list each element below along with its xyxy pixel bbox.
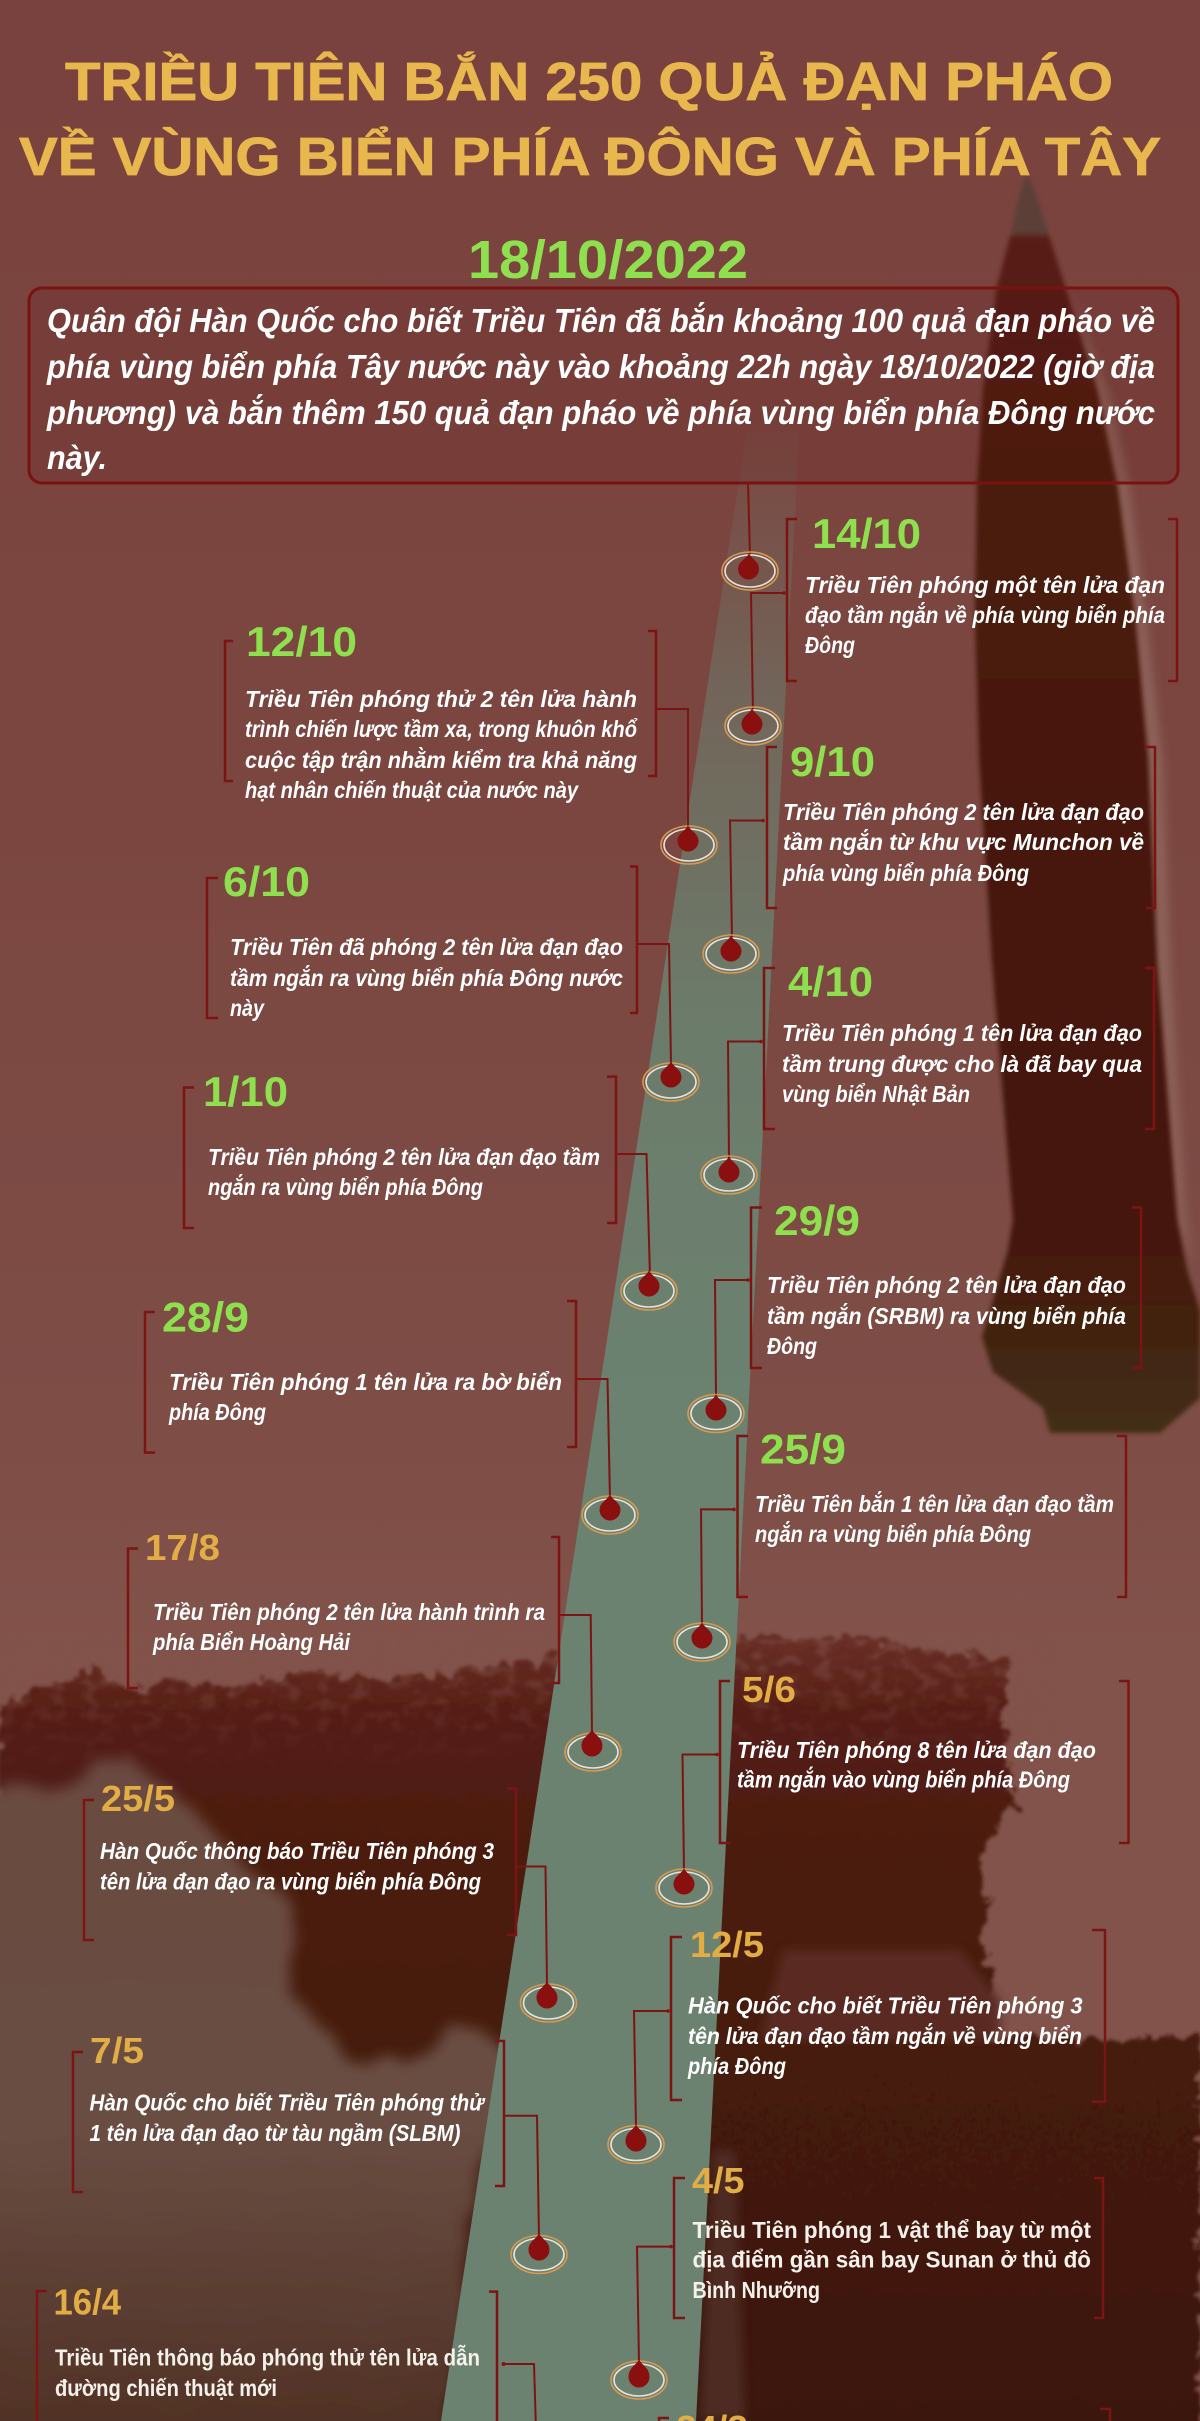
timeline item: 12/10: hạt nhân chiến thuật của nước này	[245, 777, 579, 803]
timeline item: 4/10: tầm trung được cho là đã bay qua	[782, 1051, 1142, 1077]
timeline item: 1/10: 1/10	[203, 1068, 288, 1115]
background: rocket silhouette	[975, 175, 1200, 1433]
timeline item: 16/4: Triều Tiên thông báo phóng thử tên lửa dẫn	[55, 2344, 480, 2370]
timeline item: 9/10	[703, 738, 1155, 973]
timeline item: 25/5: Hàn Quốc thông báo Triều Tiên phóng 3	[100, 1838, 494, 1864]
timeline item: 17/8	[128, 1527, 621, 1771]
timeline item: 4/10: 4/10	[788, 958, 873, 1005]
timeline item: 29/9	[688, 1197, 1141, 1432]
timeline item: 12/5: Hàn Quốc cho biết Triều Tiên phóng 3	[688, 1993, 1083, 2019]
timeline item: 6/10: này	[230, 995, 265, 1021]
timeline item: 4/10: Triều Tiên phóng 1 tên lửa đạn đạo	[782, 1020, 1142, 1046]
title	[19, 51, 1161, 187]
timeline item: 9/10: tầm ngắn từ khu vực Munchon về	[783, 828, 1144, 855]
timeline item: 28/9: 28/9	[162, 1294, 249, 1340]
timeline item: 4/5: 4/5	[692, 2160, 744, 2201]
timeline item: 25/5	[84, 1778, 576, 2022]
timeline item: 12/10: Triều Tiên phóng thử 2 tên lửa hành	[245, 686, 637, 712]
lead text panel	[29, 288, 1178, 483]
timeline item: 12/5: 12/5	[690, 1924, 764, 1965]
timeline item: 25/5: 25/5	[101, 1778, 175, 1819]
timeline item: 25/9: ngắn ra vùng biển phía Đông	[755, 1520, 1031, 1547]
lead text panel: này.	[47, 439, 107, 476]
timeline item: 17/8: Triều Tiên phóng 2 tên lửa hành trình ra	[153, 1599, 545, 1625]
timeline item: 14/10: đạo tầm ngắn về phía vùng biển phía	[805, 601, 1165, 628]
timeline item: 7/5	[73, 2030, 567, 2274]
timeline item: 24/3	[659, 2408, 1110, 2421]
lead text panel: phương) và bắn thêm 150 quả đạn pháo về phía vùng biển phía Đông nước	[46, 394, 1155, 431]
timeline item: 16/4	[37, 2282, 536, 2421]
timeline item: 28/9: Triều Tiên phóng 1 tên lửa ra bờ biển	[169, 1369, 562, 1395]
timeline item: 4/10: vùng biển Nhật Bản	[782, 1081, 970, 1107]
background: mottled tree crowns	[0, 1640, 1060, 1770]
background: rocket light stripe	[1065, 286, 1195, 1270]
marker: from lead panel	[722, 483, 778, 590]
timeline item: 12/10	[225, 618, 717, 864]
timeline item: 5/6: 5/6	[742, 1669, 796, 1710]
timeline item: 1/10: ngắn ra vùng biển phía Đông	[208, 1173, 483, 1200]
timeline item: 9/10: Triều Tiên phóng 2 tên lửa đạn đạo	[783, 799, 1144, 825]
timeline item: 4/10	[701, 958, 1154, 1194]
timeline item: 1/10	[184, 1068, 677, 1310]
background: smoke cloud	[0, 1755, 520, 2421]
timeline item: 6/10: 6/10	[223, 858, 310, 905]
timeline item: 16/4: đường chiến thuật mới	[55, 2375, 277, 2401]
timeline item: 28/9	[145, 1294, 638, 1534]
timeline item: 14/10: Đông	[805, 632, 855, 658]
background: tree line and ground	[0, 1636, 1200, 2421]
timeline item: 14/10	[725, 510, 1177, 745]
timeline item: 5/6: Triều Tiên phóng 8 tên lửa đạn đạo	[737, 1737, 1096, 1763]
timeline item: 16/4: 16/4	[54, 2282, 121, 2323]
timeline item: 5/6	[656, 1669, 1128, 1907]
timeline item: 4/5: Bình Nhưỡng	[692, 2277, 820, 2303]
timeline item: 29/9: 29/9	[774, 1197, 860, 1244]
timeline item: 12/10: trình chiến lược tầm xa, trong khuôn khổ	[245, 716, 638, 742]
timeline item: 9/10: phía vùng biển phía Đông	[782, 860, 1029, 886]
timeline item: 12/10: cuộc tập trận nhằm kiểm tra khả năng	[245, 746, 637, 773]
timeline item: 25/5: tên lửa đạn đạo ra vùng biển phía Đông	[100, 1868, 481, 1894]
timeline item: 12/5: tên lửa đạn đạo tầm ngắn về vùng biển	[688, 2022, 1082, 2049]
timeline item: 7/5: Hàn Quốc cho biết Triều Tiên phóng thử	[90, 2090, 486, 2116]
timeline item: 6/10: tầm ngắn ra vùng biển phía Đông nước	[230, 964, 623, 991]
background: lit wall	[700, 2150, 745, 2421]
timeline item: 7/5: 7/5	[90, 2030, 144, 2071]
timeline item: 28/9: phía Đông	[168, 1399, 266, 1425]
timeline item: 6/10	[207, 858, 699, 1101]
timeline item: 29/9: Đông	[767, 1333, 817, 1359]
lead text panel: Quân đội Hàn Quốc cho biết Triều Tiên đã bắn khoảng 100 quả đạn pháo về	[47, 302, 1155, 339]
timeline item: 5/6: tầm ngắn vào vùng biển phía Đông	[737, 1766, 1070, 1792]
timeline item: 9/10: 9/10	[790, 738, 875, 785]
timeline item: 14/10: 14/10	[812, 510, 921, 557]
main date: 18/10/2022	[468, 230, 748, 290]
lead text panel: phía vùng biển phía Tây nước này vào khoảng 22h ngày 18/10/2022 (giờ địa	[46, 348, 1155, 385]
timeline item: 17/8: 17/8	[145, 1527, 220, 1568]
timeline item: 14/10: Triều Tiên phóng một tên lửa đạn	[805, 572, 1165, 598]
title: VỀ VÙNG BIỂN PHÍA ĐÔNG VÀ PHÍA TÂY	[19, 126, 1161, 187]
background: building roof	[760, 1950, 1000, 2040]
timeline item: 6/10: Triều Tiên đã phóng 2 tên lửa đạn đạo	[230, 934, 623, 960]
timeline item: 12/5: phía Đông	[687, 2053, 786, 2079]
timeline item: 4/5: địa điểm gần sân bay Sunan ở thủ đô	[692, 2246, 1091, 2272]
title: TRIỀU TIÊN BẮN 250 QUẢ ĐẠN PHÁO	[65, 51, 1113, 112]
background: light beam	[441, 415, 800, 2421]
timeline item: 17/8: phía Biển Hoàng Hải	[152, 1629, 351, 1655]
timeline item: 7/5: 1 tên lửa đạn đạo từ tàu ngầm (SLBM)	[90, 2120, 460, 2146]
timeline item: 12/5	[608, 1924, 1105, 2164]
timeline item: 29/9: tầm ngắn (SRBM) ra vùng biển phía	[767, 1302, 1126, 1329]
timeline item: 4/5: Triều Tiên phóng 1 vật thể bay từ một	[692, 2217, 1091, 2243]
timeline item: 29/9: Triều Tiên phóng 2 tên lửa đạn đạo	[767, 1272, 1126, 1298]
timeline item: 25/9	[674, 1426, 1126, 1661]
timeline item: 25/9: 25/9	[760, 1426, 846, 1472]
timeline item: 4/5	[611, 2160, 1103, 2399]
timeline item: 1/10: Triều Tiên phóng 2 tên lửa đạn đạo tầm	[208, 1144, 600, 1170]
timeline item: 25/9: Triều Tiên bắn 1 tên lửa đạn đạo tầm	[755, 1490, 1114, 1517]
timeline item: 12/10: 12/10	[246, 618, 357, 665]
